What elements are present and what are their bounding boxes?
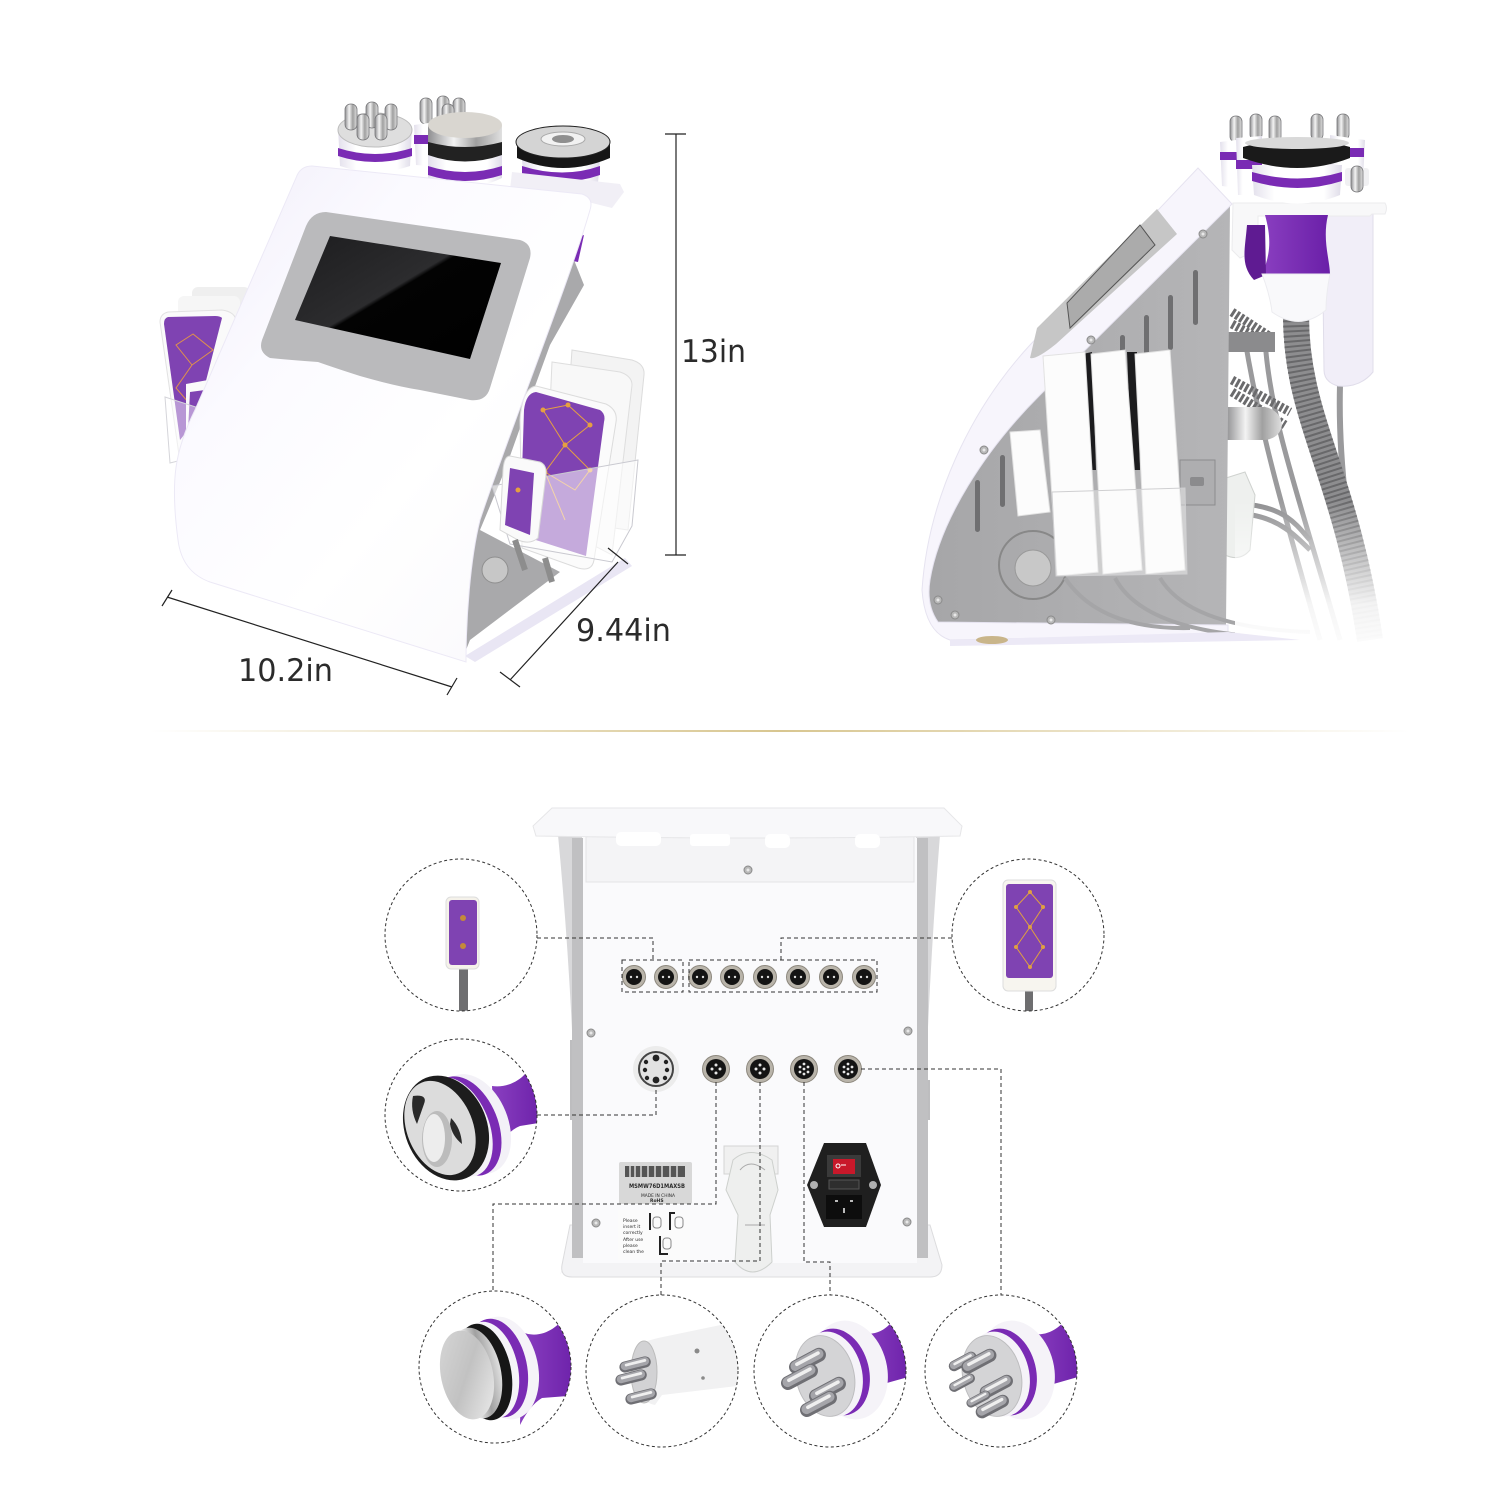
rear handpieces group (1220, 114, 1369, 195)
front view device (160, 96, 644, 662)
transparent cup handpiece (724, 1146, 778, 1272)
two-pin ports (622, 966, 876, 988)
purple handle behind shelf (568, 235, 584, 262)
callout: four-pin RF head (754, 1295, 915, 1447)
product label: MSMW76D1MAXSB (629, 1183, 685, 1190)
purple handpiece (1262, 215, 1330, 275)
callout: three-pin white head (586, 1295, 745, 1447)
instruction sticker: Please (623, 1218, 638, 1224)
screws (587, 866, 912, 1227)
callout: flat metal head (419, 1291, 580, 1443)
main top head (1243, 137, 1350, 204)
dimension: width 10.2in: 10.2in (238, 653, 333, 689)
product label: MADE IN CHINA (641, 1193, 676, 1199)
dashed port boxes (622, 960, 877, 992)
white neck (1262, 274, 1330, 322)
pad cables (1065, 578, 1310, 635)
gold divider (150, 730, 1410, 732)
slots (616, 832, 880, 848)
dark gaps behind pads (1078, 352, 1140, 470)
callout: five-pin RF head (925, 1295, 1085, 1447)
cavitation socket (633, 1046, 679, 1092)
holder shelf (510, 172, 624, 208)
recessed top (586, 832, 914, 882)
ventilation slots (975, 270, 1198, 532)
dimension: height 13in: 13in (681, 334, 746, 370)
back panel (583, 838, 917, 1263)
holder plate (1232, 203, 1386, 258)
callout: small pad (385, 859, 537, 1018)
hanging tabs and dial (934, 230, 1215, 624)
callout: large pad (952, 859, 1104, 1020)
instruction sticker: correctly (623, 1230, 643, 1236)
dimension: depth 9.44in: 9.44in (576, 613, 671, 649)
product label: RoHS (650, 1198, 664, 1204)
instruction sticker: please (623, 1243, 638, 1249)
control knob (465, 557, 632, 662)
transparent cup handpiece (1225, 472, 1255, 558)
fade at base of cables (1235, 500, 1420, 660)
grey side panel (928, 205, 1230, 625)
rubber feet (578, 1270, 920, 1277)
grey bezel edge (1030, 209, 1177, 358)
instruction sticker: insert it (623, 1224, 641, 1230)
grey connector (1228, 332, 1275, 352)
dimension: depth 9.44in (500, 548, 671, 687)
instruction sticker: After use (623, 1237, 643, 1243)
top plate (533, 808, 962, 838)
four RF ports (702, 1056, 862, 1082)
instruction sticker: clean the (623, 1249, 644, 1255)
white handheld handle (1322, 212, 1373, 386)
white side pads (1010, 350, 1187, 576)
touch screen (295, 236, 501, 359)
rear view device (533, 808, 962, 1277)
base plate (562, 1225, 942, 1277)
left lipo pads (160, 287, 250, 463)
product label (619, 1162, 692, 1204)
dimension: height 13in (665, 134, 746, 555)
side view device (922, 114, 1420, 660)
screen edge (1067, 225, 1155, 328)
base and foot (950, 632, 1300, 646)
top handpiece heads (338, 96, 610, 190)
callout: cavitation head (385, 1039, 545, 1193)
power module (807, 1143, 881, 1227)
main white shell (174, 166, 591, 662)
instruction sticker (618, 1210, 690, 1260)
dimension: width 10.2in (162, 590, 457, 695)
white curved shell (922, 168, 1232, 640)
side panel behind shell (464, 255, 584, 655)
side flares (558, 835, 582, 1275)
side strips (572, 838, 928, 1258)
hoses and cables (1232, 312, 1370, 640)
right lipo pads (492, 350, 644, 582)
connector cylinder (1226, 407, 1282, 440)
dashed leader lines (493, 938, 1001, 1295)
grey screen bezel (261, 212, 531, 400)
